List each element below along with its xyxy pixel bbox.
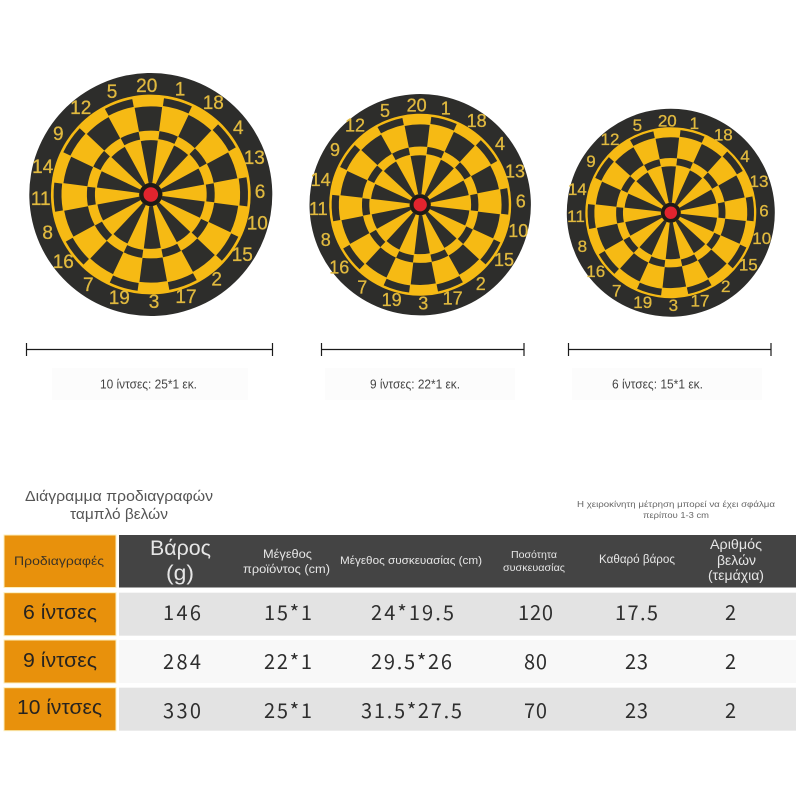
board numbers: 6 inch: 3 bbox=[669, 296, 678, 315]
row: 6 inch: 2 bbox=[725, 597, 736, 626]
row: 10 inch: 31.5*27.5 bbox=[361, 695, 462, 724]
row: 10 inch: 10 ίντσες bbox=[17, 697, 102, 719]
board numbers: 9 inch: 4 bbox=[495, 134, 505, 154]
board numbers: 9 inch: 11 bbox=[309, 199, 328, 219]
board numbers: 10 inch: 13 bbox=[244, 148, 265, 169]
board numbers: 10 inch: 6 bbox=[255, 182, 265, 203]
table header: columns: βελών bbox=[717, 553, 756, 568]
board numbers: 10 inch: 19 bbox=[109, 288, 130, 309]
row: 9 inch bbox=[4, 640, 796, 683]
board numbers: 9 inch: 17 bbox=[443, 288, 463, 308]
board numbers: 10 inch: 10 bbox=[247, 214, 268, 234]
board numbers: 10 inch: 12 bbox=[70, 98, 91, 119]
table header: columns: συσκευασίας bbox=[503, 562, 565, 574]
dimension line: 9 inch bbox=[321, 343, 524, 356]
row: 6 inch: 17.5 bbox=[615, 597, 658, 626]
board numbers: 9 inch: 18 bbox=[467, 111, 487, 131]
size label: 6 inch: 6 ίντσες: 15*1 εκ. bbox=[612, 376, 703, 392]
board numbers: 6 inch: 13 bbox=[750, 172, 768, 191]
table header: columns bbox=[119, 535, 796, 588]
board numbers: 9 inch: 7 bbox=[357, 278, 367, 298]
table title: Διάγραμμα προδιαγραφών bbox=[25, 489, 213, 505]
row: 10 inch: 330 bbox=[163, 695, 201, 724]
table header: columns: Αριθμός bbox=[710, 537, 763, 552]
board numbers: 6 inch: 6 bbox=[759, 202, 769, 220]
row: 9 inch: 23 bbox=[625, 646, 648, 675]
board numbers: 9 inch: 6 bbox=[516, 192, 526, 212]
table header: columns: Ποσότητα bbox=[511, 549, 557, 561]
board numbers: 6 inch: 4 bbox=[740, 147, 750, 166]
board numbers: 9 inch: 10 bbox=[508, 221, 528, 241]
row: 9 inch: 2 bbox=[725, 646, 736, 675]
board numbers: 9 inch: 12 bbox=[345, 116, 365, 136]
table title bbox=[25, 489, 213, 523]
table title: ταμπλό βελών bbox=[70, 507, 168, 523]
board numbers: 10 inch: 1 bbox=[175, 80, 185, 100]
row: 10 inch: 23 bbox=[625, 695, 648, 724]
board numbers: 9 inch: 1 bbox=[441, 98, 451, 118]
board numbers: 10 inch: 8 bbox=[42, 223, 53, 244]
board numbers: 6 inch: 5 bbox=[633, 116, 642, 135]
table header: columns: προϊόντος (cm) bbox=[243, 564, 330, 576]
board numbers: 10 inch: 5 bbox=[107, 82, 117, 103]
board numbers: 6 inch: 9 bbox=[586, 152, 596, 171]
table header: columns: Μέγεθος bbox=[263, 549, 313, 561]
board numbers: 6 inch: 14 bbox=[568, 180, 587, 199]
board numbers: 9 inch: 13 bbox=[505, 162, 525, 182]
board numbers: 9 inch: 3 bbox=[418, 293, 428, 313]
row: 6 inch: 6 ίντσες bbox=[23, 602, 97, 624]
board numbers: 10 inch: 16 bbox=[53, 252, 74, 273]
board numbers: 6 inch: 16 bbox=[586, 262, 605, 281]
board numbers: 9 inch: 19 bbox=[382, 290, 402, 310]
board numbers: 10 inch: 17 bbox=[175, 287, 197, 308]
row: 6 inch: 24*19.5 bbox=[371, 597, 454, 626]
board numbers: 10 inch: 7 bbox=[83, 275, 94, 296]
table header: columns: Βάρος bbox=[150, 537, 211, 560]
board numbers: 6 inch: 7 bbox=[612, 282, 621, 300]
row: 9 inch: 22*1 bbox=[264, 646, 312, 675]
board numbers: 10 inch: 20 bbox=[136, 76, 157, 97]
table header: row label bbox=[4, 535, 116, 588]
size label: 9 inch: 9 ίντσες: 22*1 εκ. bbox=[370, 376, 460, 392]
table header: columns: Καθαρό βάρος bbox=[599, 554, 675, 566]
size label: 10 inch: 10 ίντσες: 25*1 εκ. bbox=[100, 376, 197, 392]
row: 10 inch: 25*1 bbox=[264, 695, 312, 724]
board numbers: 10 inch: 2 bbox=[211, 270, 222, 290]
table header: columns: (τεμάχια) bbox=[708, 568, 764, 583]
board numbers: 9 inch: 16 bbox=[329, 257, 349, 277]
measurement note: περίπου 1-3 cm bbox=[643, 510, 709, 520]
dartboard: 9 inch bbox=[305, 90, 535, 320]
dimension line: 6 inch bbox=[568, 343, 772, 356]
board numbers: 10 inch: 3 bbox=[149, 292, 159, 313]
board numbers: 10 inch bbox=[31, 76, 268, 313]
spec table bbox=[4, 535, 796, 731]
row: 6 inch bbox=[4, 593, 796, 636]
board numbers: 10 inch: 14 bbox=[32, 157, 54, 178]
board numbers: 6 inch: 1 bbox=[690, 114, 699, 133]
board numbers: 6 inch: 15 bbox=[739, 256, 758, 274]
row: 10 inch bbox=[4, 688, 796, 731]
board numbers: 9 inch: 2 bbox=[476, 274, 486, 294]
board numbers: 9 inch: 9 bbox=[330, 140, 340, 160]
board numbers: 6 inch bbox=[567, 112, 771, 315]
table header: columns: (g) bbox=[166, 562, 194, 585]
table header: columns: Μέγεθος συσκευασίας (cm) bbox=[340, 555, 482, 567]
board numbers: 6 inch: 8 bbox=[578, 237, 587, 256]
board numbers: 9 inch bbox=[309, 96, 528, 313]
dimension line: 10 inch bbox=[26, 343, 273, 356]
row: 9 inch: 80 bbox=[524, 646, 547, 675]
size label: 9 inch bbox=[325, 368, 515, 400]
board numbers: 6 inch: 2 bbox=[721, 277, 730, 296]
board numbers: 10 inch: 9 bbox=[53, 124, 64, 145]
dartboard: 6 inch bbox=[562, 104, 780, 321]
size label: 6 inch bbox=[572, 368, 762, 400]
board numbers: 6 inch: 11 bbox=[567, 207, 585, 226]
measurement note: Η χειροκίνητη μέτρηση μπορεί να έχει σφάλμα bbox=[577, 499, 775, 509]
board numbers: 9 inch: 8 bbox=[321, 230, 331, 250]
row: 9 inch: 9 ίντσες bbox=[23, 650, 97, 672]
row: 10 inch: 70 bbox=[524, 695, 547, 724]
board numbers: 9 inch: 14 bbox=[311, 170, 331, 190]
dartboard: 10 inch bbox=[26, 70, 276, 319]
board numbers: 6 inch: 18 bbox=[714, 126, 733, 144]
board numbers: 10 inch: 15 bbox=[232, 245, 253, 266]
row: 6 inch: 15*1 bbox=[264, 597, 312, 626]
board numbers: 6 inch: 12 bbox=[601, 130, 619, 149]
row: 6 inch: 120 bbox=[518, 597, 553, 626]
board numbers: 6 inch: 20 bbox=[658, 112, 677, 130]
size label: 10 inch bbox=[52, 368, 248, 400]
board numbers: 10 inch: 18 bbox=[203, 93, 224, 114]
board numbers: 9 inch: 5 bbox=[380, 101, 390, 121]
table header: row label: Προδιαγραφές bbox=[14, 554, 104, 568]
board numbers: 6 inch: 10 bbox=[752, 229, 771, 248]
board numbers: 10 inch: 4 bbox=[233, 118, 244, 139]
row: 10 inch: 2 bbox=[725, 695, 736, 724]
measurement note bbox=[577, 499, 775, 520]
row: 6 inch: 146 bbox=[163, 597, 201, 626]
row: 9 inch: 29.5*26 bbox=[371, 646, 452, 675]
board numbers: 9 inch: 20 bbox=[407, 96, 427, 116]
board numbers: 6 inch: 17 bbox=[691, 292, 709, 310]
board numbers: 10 inch: 11 bbox=[31, 189, 51, 210]
board numbers: 6 inch: 19 bbox=[633, 293, 652, 312]
row: 9 inch: 284 bbox=[163, 646, 201, 675]
board numbers: 9 inch: 15 bbox=[494, 250, 514, 270]
